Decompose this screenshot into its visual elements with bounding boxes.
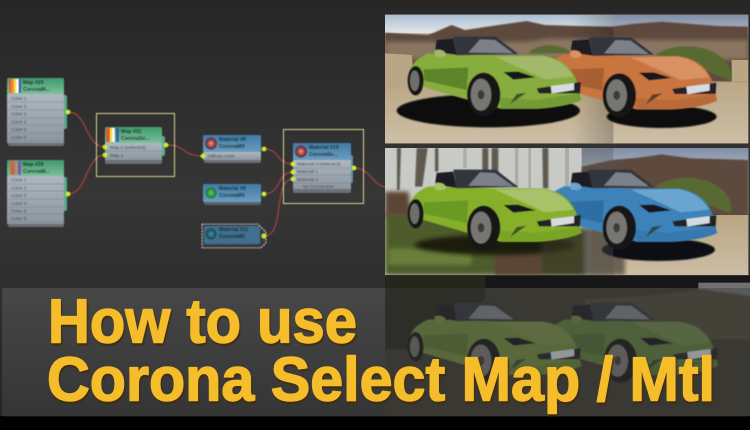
selection box: material: [284, 130, 364, 204]
node: Material #10: Material 1: [297, 169, 318, 175]
node: Map #28: Color 2: [11, 186, 27, 192]
node: Map #31: Map 1: [110, 153, 124, 159]
node: Material #10: [291, 143, 356, 193]
node: Map #29: Color 2: [11, 104, 27, 110]
node: Map #29: Color 1: [11, 96, 27, 102]
node: Map #28: Color 1: [11, 178, 27, 184]
node: Map #31: [103, 127, 168, 164]
node: Map #29: Map #29: [23, 80, 44, 86]
node: Material #10: CoronaSe...: [309, 152, 338, 158]
title text: How to use: [49, 290, 358, 358]
node: Material #8: Material #8: [219, 137, 246, 143]
node: Map #28: Color 6: [11, 216, 27, 222]
car: green: [408, 37, 582, 117]
node: Map #28: Color 3: [11, 193, 27, 199]
panel: dimmed render behind title: [385, 276, 750, 416]
node: Map #28: CoronaM...: [23, 169, 50, 175]
node: Map #29: Color 4: [11, 120, 27, 126]
node: Material #8: CoronaMtl: [219, 144, 245, 150]
panel: forest render: [385, 148, 748, 275]
title text: How to use: [48, 288, 357, 356]
node: Map #28: [7, 160, 70, 227]
title text: [47, 288, 716, 416]
node: Map #28: Color 5: [11, 208, 27, 214]
car: lime: [408, 170, 582, 250]
connection wires: [68, 112, 385, 236]
title text: Corona Select Map / Mtl: [48, 348, 716, 416]
title text: Corona Select Map / Mtl: [47, 346, 715, 414]
selection box: map: [96, 114, 174, 176]
title banner: [2, 288, 750, 417]
node: Map #29: CoronaM...: [23, 87, 50, 93]
node: Map #29: Color 5: [11, 127, 27, 133]
node: Material #8: [201, 135, 266, 163]
node: Map #28: Map #28: [23, 162, 44, 168]
node: Material #10: Material 0 (selected): [297, 162, 341, 168]
node: Map #29: [7, 78, 70, 146]
node: Material #11: CoronaMtl: [219, 234, 245, 240]
node: Material #9: Material #9: [219, 186, 246, 192]
node: Material #9: CoronaMtl: [219, 193, 245, 199]
panel: node graph: [7, 78, 385, 248]
node: Material #10: tor Connection: [303, 184, 335, 190]
node: Map #31: Map #31: [121, 129, 142, 135]
node: Material #8: Diffuse color: [208, 154, 235, 160]
node: Map #29: Color 3: [11, 112, 27, 118]
node: Material #10: Material 2: [297, 177, 318, 183]
car: orange: [543, 37, 717, 117]
node: Map #29: Color 6: [11, 135, 27, 141]
car: blue: [543, 170, 717, 250]
node: Map #28: Color 4: [11, 201, 27, 207]
node: Map #31: Map 0 (selected): [110, 145, 146, 151]
node: Material #11: [202, 224, 266, 248]
panel: desert render: [385, 14, 748, 144]
node: Map #31: CoronaSe...: [121, 136, 150, 142]
node: Material #9: [203, 184, 266, 205]
node: Material #10: Material #10: [309, 145, 339, 151]
node: Material #11: Material #11: [219, 227, 249, 233]
